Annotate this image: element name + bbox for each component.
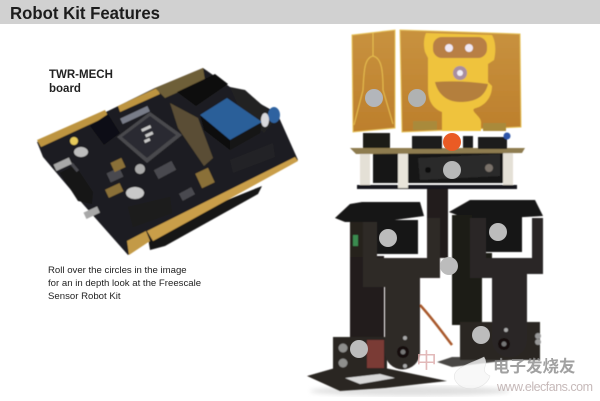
head right panel [400,30,521,132]
ankle servos [333,337,387,371]
board shadow [147,186,262,250]
watermark: 电子发烧友 [493,356,576,376]
instruction text: for an in depth look at the Freescale [48,278,201,289]
capacitors and button [70,137,78,145]
watermark: www.elecfans.com [496,380,593,394]
instruction text: Roll over the circles in the image [48,265,187,276]
hip servos [335,202,424,222]
eye leds [445,44,453,52]
watermark [416,350,593,394]
connector blocks [177,74,228,106]
sensor module [200,98,262,140]
watermark logo [454,357,490,389]
gold pads [105,158,215,198]
lower plate [357,185,517,189]
nose led [453,66,467,80]
gold edge back right [118,88,160,112]
head left panel [352,30,395,132]
usb ports [53,157,72,171]
upper plate [350,148,525,154]
left leg bracket [363,218,440,370]
chest servo [373,153,398,183]
small board parts [70,106,195,201]
pin field [170,103,213,166]
instruction text: Sensor Robot Kit [48,291,121,302]
rear legs [350,256,384,342]
image: TWR-MECH board [37,68,298,255]
image: robot [307,30,543,396]
green led [353,235,358,246]
active hotspot [443,133,461,151]
right foot [437,357,535,367]
mouth [435,81,488,102]
connector row [363,133,390,148]
center spine [427,186,448,258]
logo on chip [141,125,153,143]
header band [0,0,600,24]
gold edge back left [37,110,108,147]
spacers [360,152,370,185]
left foot [307,368,447,391]
blue knob [268,107,280,123]
robot face [424,33,495,131]
screws [338,344,348,352]
title: Robot Kit Features [10,3,160,23]
board label: TWR-MECH [49,69,113,81]
eye window [433,37,487,58]
right leg bracket [470,218,543,358]
floor shadow [310,386,510,396]
wire [420,305,452,345]
header pins [155,68,205,98]
board body [37,68,298,255]
pcb pads [413,121,437,130]
watermark: 中 [416,350,437,373]
hotspot circles [350,89,507,358]
gold edge corner [127,231,150,255]
main chip [117,112,182,163]
gold edge front [147,157,298,241]
board label: board [49,83,81,95]
